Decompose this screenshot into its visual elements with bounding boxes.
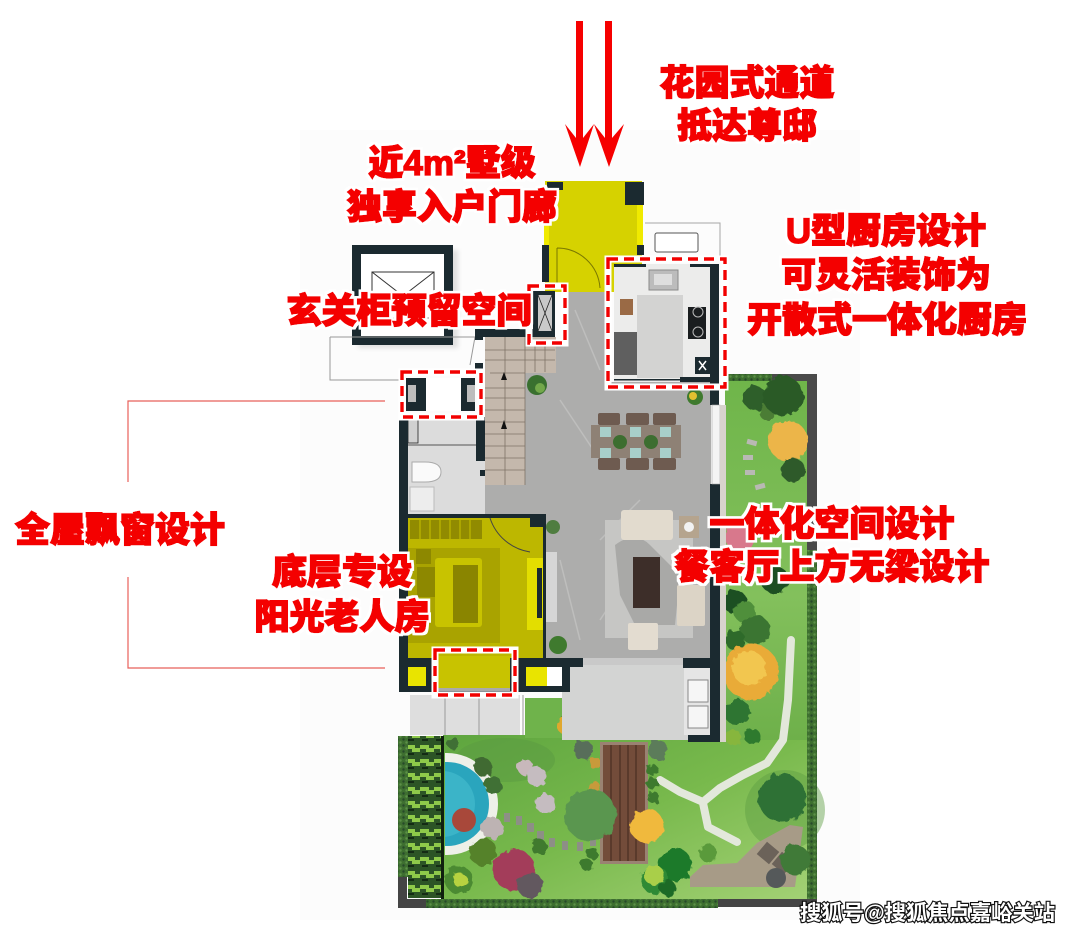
- label: open living space: 一体化空间设计: [709, 505, 955, 544]
- east garden stepping stones: [743, 439, 766, 490]
- stairwell bay window: [406, 378, 475, 411]
- wooden deck: [600, 742, 648, 864]
- kitchen: [614, 264, 719, 405]
- bracket: whole-house bay windows: [128, 401, 385, 668]
- label: entry porch: 近4m²墅级: [368, 144, 536, 183]
- bathroom: [399, 417, 485, 520]
- label: elder bedroom: 阳光老人房: [254, 598, 430, 637]
- swimming pool: [445, 753, 498, 855]
- stepping stones: [504, 813, 596, 851]
- dashed highlight: kitchen: [608, 259, 725, 387]
- potted plant: [527, 375, 547, 395]
- garden lawn: [443, 380, 825, 900]
- bedroom yellow: [408, 514, 546, 659]
- stairs: [475, 329, 556, 485]
- label: garden path: 花园式通道: [659, 64, 835, 103]
- living room set: [546, 510, 705, 654]
- label: garden path: 抵达尊邸: [677, 107, 817, 146]
- garden hedge borders: [398, 374, 817, 908]
- floor plan: [330, 181, 825, 908]
- label: bay windows: 全屋飘窗设计: [15, 511, 225, 550]
- label: U kitchen: 可灵活装饰为: [781, 256, 991, 295]
- elevator shaft: [330, 245, 475, 380]
- entry porch yellow: [542, 181, 720, 292]
- watermark: 搜狐号@搜狐焦点嘉峪关站: [800, 901, 1055, 925]
- dining set: [591, 413, 681, 470]
- stone seating patio: [690, 825, 803, 888]
- dashed highlight: bay window: [435, 650, 515, 695]
- concrete floor: [485, 292, 711, 658]
- terrace and patio paving: [410, 658, 688, 740]
- label: entry porch: 独享入户门廊: [347, 187, 557, 227]
- label: closet: 玄关柜预留空间: [286, 292, 532, 331]
- bay windows and south walls: [399, 405, 726, 742]
- label: U kitchen: U型厨房设计: [786, 212, 986, 251]
- label: elder bedroom: 底层专设: [272, 553, 412, 592]
- garden trees: [445, 376, 810, 898]
- garden shrubs behind deck: [588, 757, 601, 793]
- stone path: [660, 640, 791, 842]
- entry closet: [533, 291, 555, 337]
- left vine hedge: [398, 736, 444, 899]
- plan image tint: [300, 130, 860, 920]
- dashed highlight: closet: [529, 286, 565, 343]
- label: open living space: 餐客厅上方无梁设计: [674, 547, 990, 587]
- dashed highlight: stair window: [402, 372, 481, 417]
- arrows: garden access: [565, 21, 624, 167]
- label: U kitchen: 开散式一体化厨房: [747, 301, 1027, 340]
